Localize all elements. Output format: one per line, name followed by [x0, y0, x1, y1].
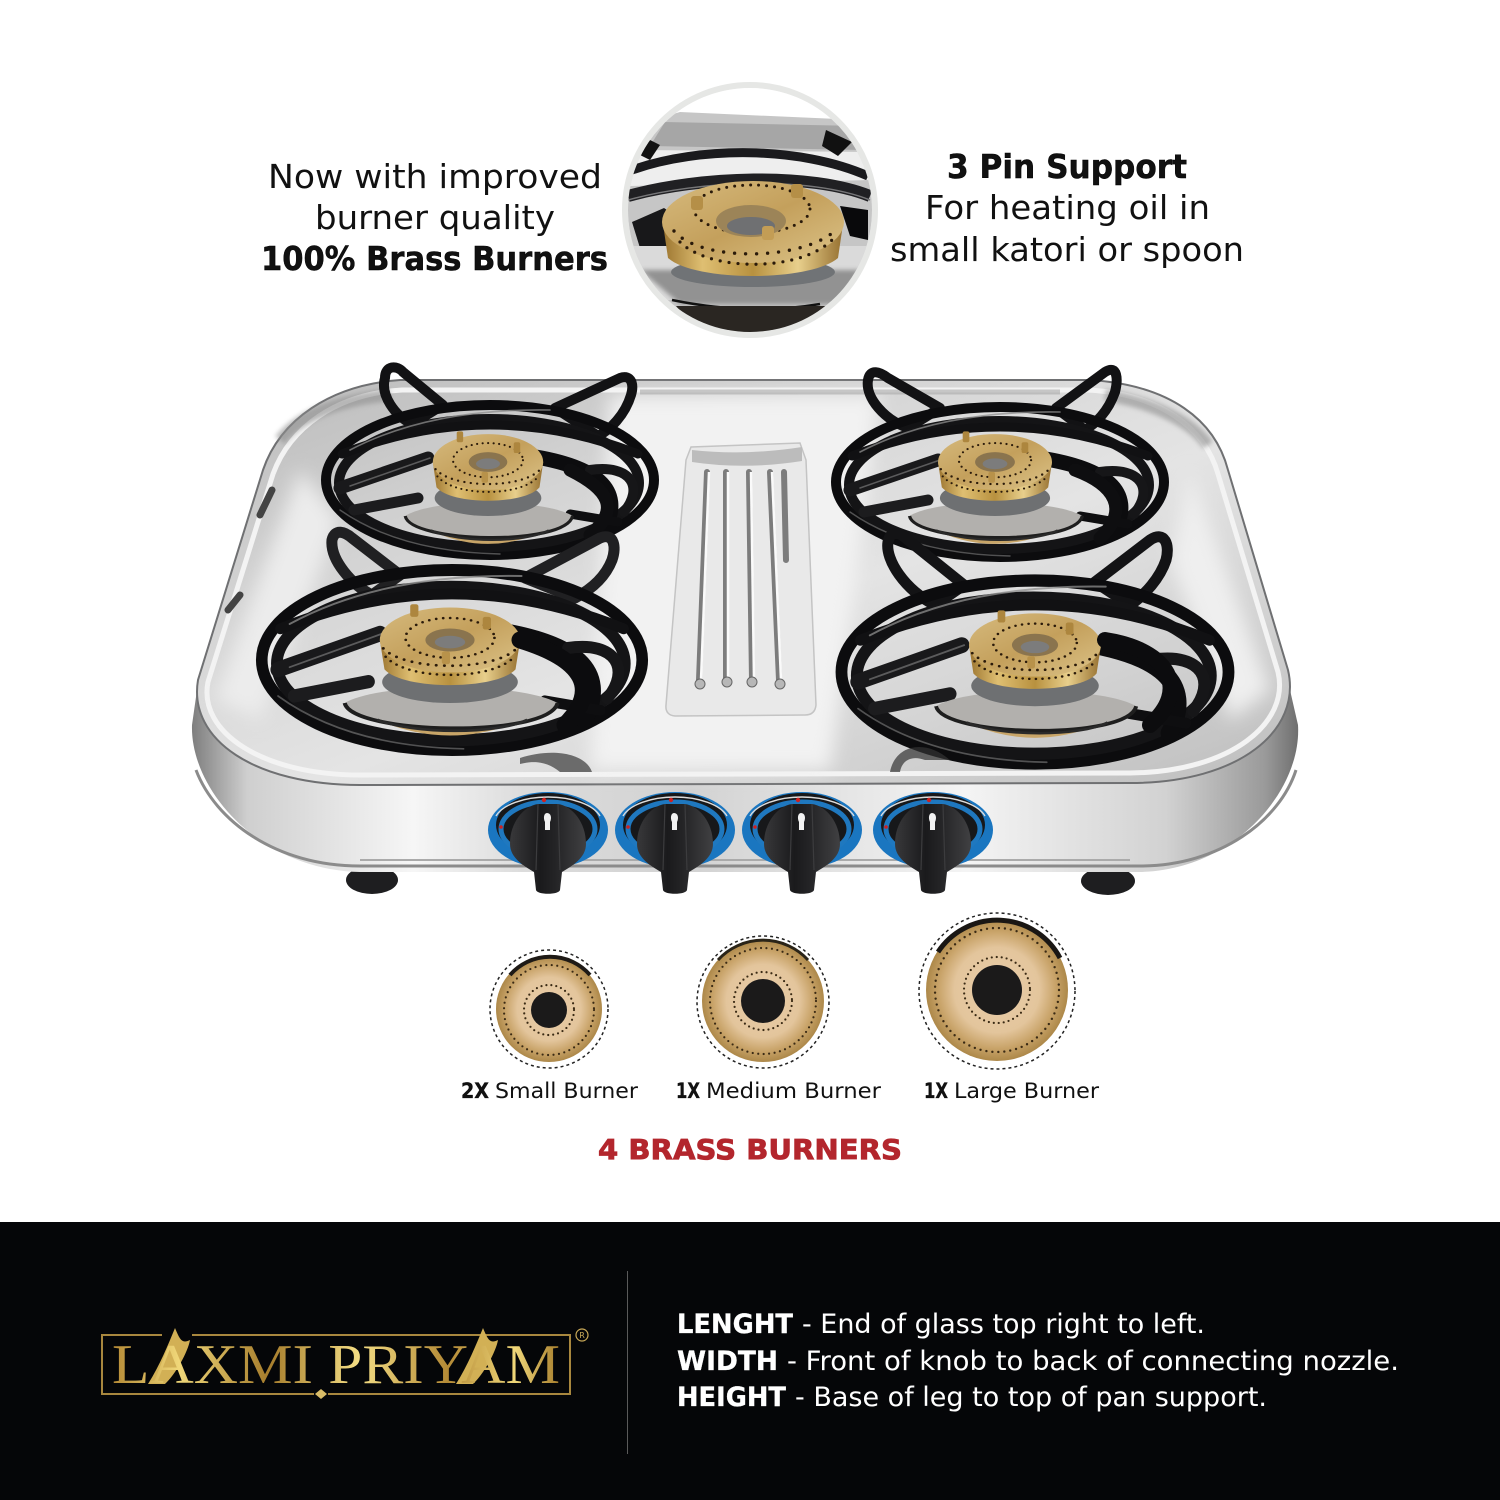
- text block: 3 pin support: For heating oil in: [925, 188, 1210, 227]
- burner labels: [461, 1079, 1099, 1103]
- divider: [627, 1271, 628, 1454]
- text block: improved burner quality: 100% Brass Burners: [261, 239, 608, 278]
- burner labels: Small Burner: [495, 1079, 638, 1103]
- callout: burner close-up circle: [620, 80, 880, 340]
- burner: back left: [326, 367, 654, 555]
- center drip tray: [666, 443, 816, 716]
- text block: 3 pin support: [890, 147, 1244, 269]
- dimension notes: LENGHT: [677, 1309, 794, 1340]
- gas stove product illustration: [192, 367, 1298, 895]
- text block: improved burner quality: burner quality: [315, 198, 555, 237]
- stove top plate: [197, 380, 1290, 785]
- dimension notes: - End of glass top right to left.: [802, 1309, 1205, 1340]
- burner size: small: [490, 950, 608, 1068]
- stove front skirt: [192, 690, 1298, 872]
- dimension notes: - Base of leg to top of pan support.: [795, 1382, 1267, 1413]
- dimension notes: - Front of knob to back of connecting nozzle.: [787, 1346, 1399, 1377]
- footer panel: [0, 1222, 1500, 1500]
- stove plate rim: [207, 390, 1280, 775]
- burner: front left: [262, 532, 642, 772]
- dimension notes: WIDTH: [677, 1346, 778, 1377]
- burner: front right: [841, 534, 1229, 772]
- logo: Laxmi Priyam: LAXMI PRIYAM: [112, 1334, 560, 1396]
- stove feet: [346, 866, 1135, 895]
- burner labels: Medium Burner: [706, 1079, 881, 1103]
- text block: improved burner quality: [261, 157, 608, 278]
- text block: 3 pin support: small katori or spoon: [890, 230, 1244, 269]
- burner labels: 1X: [676, 1079, 700, 1103]
- burner: back right: [836, 370, 1164, 557]
- burner labels: 2X: [461, 1079, 489, 1103]
- text block: improved burner quality: Now with improved: [268, 157, 602, 196]
- dimension notes: [677, 1309, 1399, 1413]
- dimension notes: HEIGHT: [677, 1382, 787, 1413]
- burner size: large: [919, 913, 1075, 1069]
- burner size: medium: [697, 936, 829, 1068]
- burner labels: 1X: [924, 1079, 948, 1103]
- plate reflections: [215, 392, 1270, 770]
- burner labels: Large Burner: [954, 1079, 1099, 1103]
- heading: 4 brass burners: 4 BRASS BURNERS: [598, 1133, 902, 1166]
- text block: 3 pin support: 3 Pin Support: [947, 147, 1187, 186]
- logo: Laxmi Priyam: R: [579, 1331, 585, 1340]
- control knobs: [488, 792, 993, 894]
